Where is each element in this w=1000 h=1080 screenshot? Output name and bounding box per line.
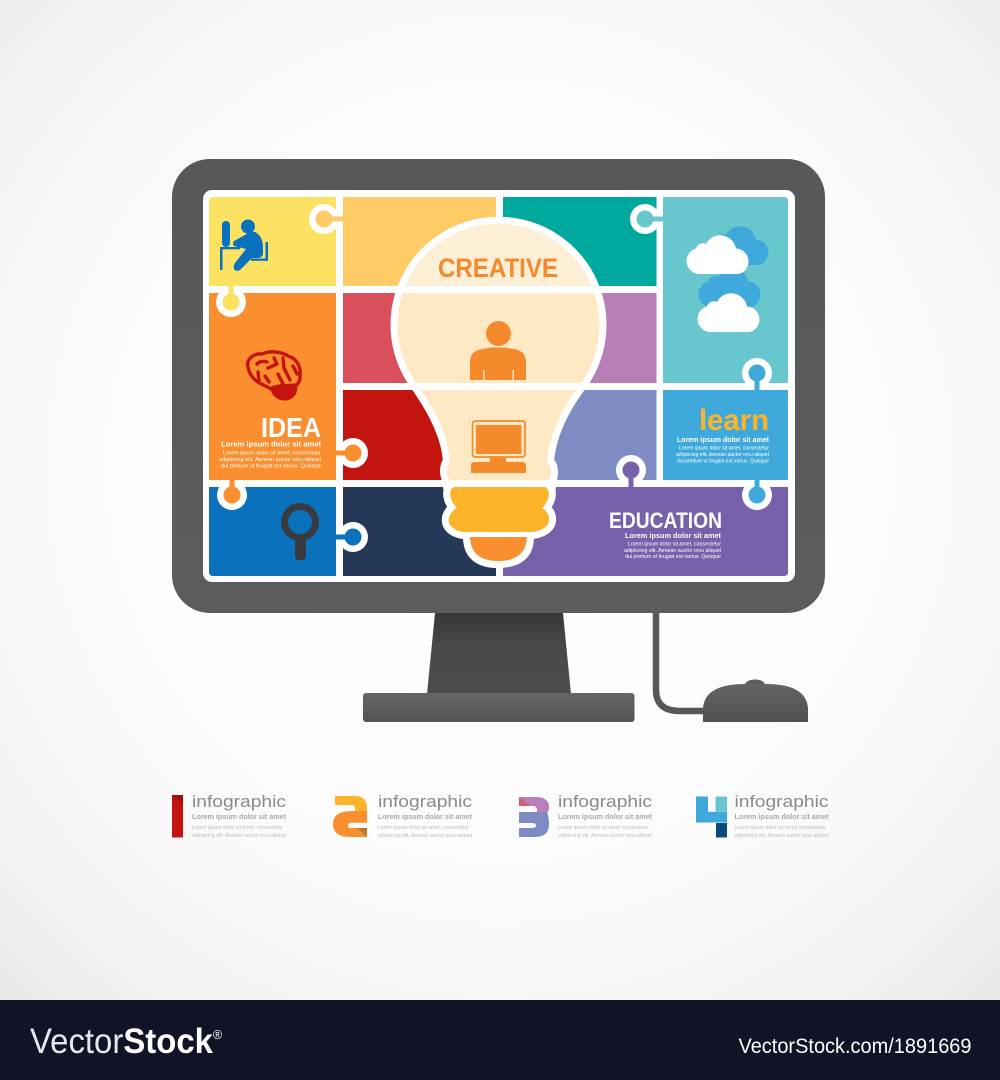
icon: computer (471, 421, 526, 473)
legend text 3 (558, 792, 653, 839)
text block: idea: dui pretium ut feugiat est varius. Quisque (221, 464, 321, 470)
legend text 3: Lorem ipsum dolor sit amet, consectetur (558, 825, 649, 831)
legend text 4: adipiscing elit. Aenean auctor orcu aliquet (734, 833, 829, 839)
icon: number 3 (519, 797, 549, 837)
legend text 2: infographic (378, 792, 473, 811)
mouse cable (656, 613, 706, 711)
text block: idea: Lorem ipsum dolor sit amet (221, 440, 322, 448)
knob: clouds into teal (630, 204, 663, 234)
monitor body (172, 159, 825, 613)
icon: magnifier (284, 506, 316, 560)
legend text 3: adipiscing elit. Aenean auctor orcu aliquet (558, 833, 653, 839)
text block: idea: Lorem ipsum dolor sit amet, consectetur (223, 450, 321, 456)
legend text 1: Lorem ipsum dolor sit amet (192, 812, 287, 821)
legend item 3 (519, 792, 653, 839)
legend item 1 (172, 792, 287, 839)
panel: idea (209, 293, 336, 480)
legend text 2 (378, 792, 473, 839)
knob: light orange into yellow (309, 204, 343, 234)
knob: learn into education (742, 480, 772, 510)
text block: education (609, 508, 722, 560)
text block: education: dui pretium ut feugiat est varius. Quisque (625, 554, 721, 560)
knob: blue into navy (336, 522, 368, 552)
legend text 3: infographic (558, 792, 653, 811)
icon: clouds (687, 226, 768, 332)
lightbulb base outline (449, 487, 549, 561)
panel: learn (663, 390, 788, 480)
icon: person (470, 321, 526, 380)
panel: rose (343, 293, 496, 383)
legend item 2 (333, 792, 473, 839)
text block: learn: dui pretium ut feugiat est varius. Quisque (677, 458, 769, 464)
legend text 4: Lorem ipsum dolor sit amet, consectetur (734, 825, 826, 831)
legend item 4 (696, 792, 829, 839)
legend text 2: adipiscing elit. Aenean auctor orcu aliquet (378, 833, 473, 839)
legend text 1 (192, 792, 287, 839)
monitor screen with jigsaw (203, 190, 795, 582)
footer url: VectorStock.com/1891669 (738, 1034, 972, 1058)
knob: yellow into idea (216, 286, 246, 317)
text block: education: Lorem ipsum dolor sit amet (625, 533, 722, 540)
legend text 2: Lorem ipsum dolor sit amet (378, 812, 473, 821)
icon: brain (248, 352, 300, 399)
legend text 2: Lorem ipsum dolor sit amet, consectetur (378, 825, 469, 831)
lightbulb base upper (449, 487, 549, 532)
legend text 4: infographic (734, 792, 829, 811)
text block: learn (676, 404, 770, 464)
monitor stand neck (427, 613, 571, 694)
footer bar (0, 1000, 1000, 1080)
icon: number 2 (333, 796, 367, 837)
text block: idea: IDEA (261, 412, 321, 443)
panel: yellow (209, 197, 336, 286)
text block: learn: Lorem ipsum dolor sit amet, consectetur (679, 446, 769, 452)
legend text 1: Lorem ipsum dolor sit amet, consectetur (192, 825, 283, 831)
panel: periwinkle (503, 390, 656, 480)
legend text 4: Lorem ipsum dolor sit amet (734, 812, 829, 821)
footer logo: ® (213, 1027, 222, 1042)
knob: idea into blue (217, 480, 247, 510)
legend text 4 (734, 792, 829, 839)
panel: teal (503, 197, 656, 286)
icon: mouse (703, 680, 808, 722)
icon: person at computer (220, 220, 268, 271)
icon: number 1 (172, 795, 183, 838)
lightbulb glass (397, 224, 600, 487)
panel: mauve (503, 293, 656, 383)
text block: education: EDUCATION (609, 508, 722, 533)
panel: blue (209, 487, 336, 576)
knob: idea into red (336, 438, 368, 468)
panel: light orange (343, 197, 496, 286)
footer logo: VectorStock (30, 1022, 219, 1061)
text block: education: Lorem ipsum dolor sit amet, consectetur (628, 542, 721, 548)
lightbulb base lower (470, 537, 527, 561)
text block: idea (219, 412, 322, 470)
icon: number 4 (696, 796, 727, 838)
panel: clouds (663, 197, 788, 383)
text block: learn: Lorem ipsum dolor sit amet (677, 437, 770, 444)
panel: red (343, 390, 496, 480)
text block: idea: adipiscing elit. Aenean auctor orcu aliquet (219, 457, 321, 463)
legend text 3: Lorem ipsum dolor sit amet (558, 812, 653, 821)
panel: education (503, 487, 788, 576)
monitor stand base (363, 693, 634, 722)
panel: navy (343, 487, 496, 576)
knob: education into periwinkle (616, 455, 646, 487)
text block: learn: adipiscing elit. Aenean auctor orcu aliquet (676, 452, 769, 458)
knob: learn into clouds (742, 358, 772, 390)
legend text 1: adipiscing elit. Aenean auctor orcu aliquet (192, 833, 287, 839)
legend text 1: infographic (192, 792, 287, 811)
text block: education: adipiscing elit. Aenean auctor orcu aliquet (624, 548, 722, 554)
heading: creative: CREATIVE (438, 253, 558, 283)
text block: learn: learn (699, 404, 769, 437)
